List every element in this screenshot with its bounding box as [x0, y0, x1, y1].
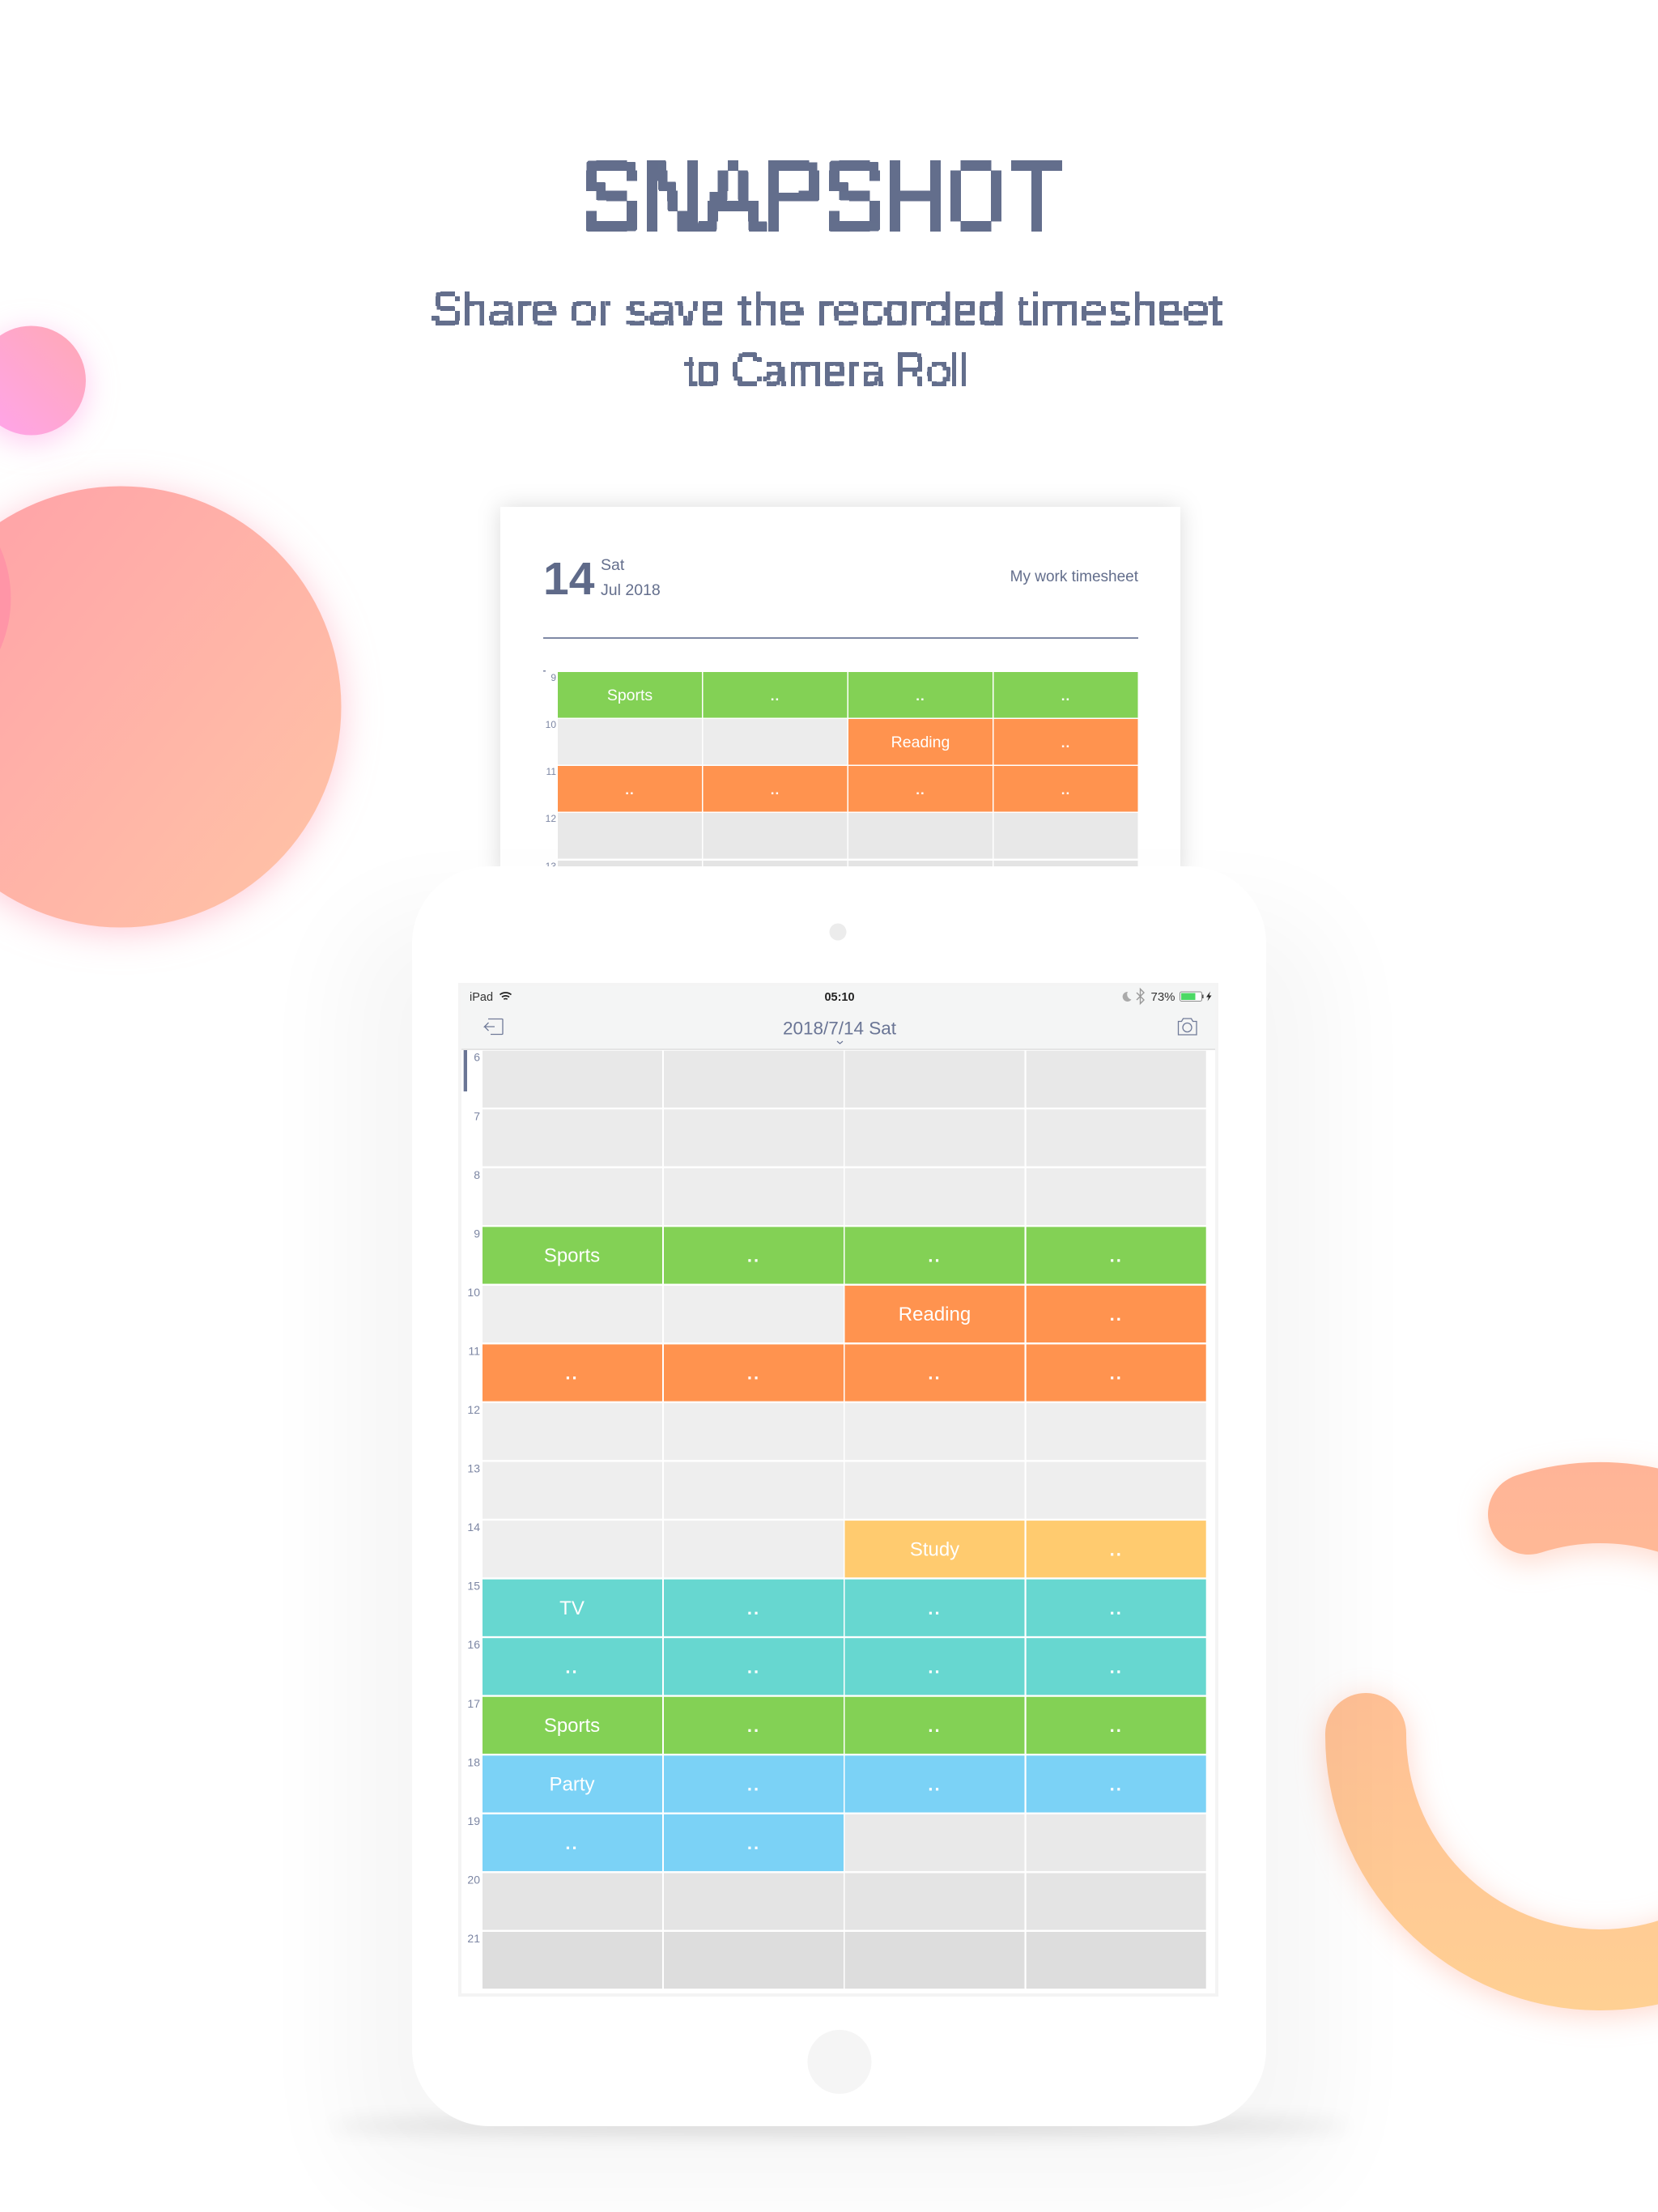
decorative arc: lower ring segment	[1366, 1733, 1658, 1970]
clock: 05:10	[824, 991, 855, 1004]
paper timesheet grid: ..	[916, 688, 925, 704]
icon: wifi	[500, 993, 512, 999]
paper timesheet grid: Sports	[607, 687, 653, 704]
shared timesheet paper	[500, 507, 1180, 907]
row 8	[474, 1168, 1206, 1225]
tablet soft shadow	[329, 907, 1350, 2194]
icon: camera	[1179, 1019, 1197, 1035]
row 17: sports: ..	[1110, 1716, 1123, 1736]
sheet name: My work timesheet	[1010, 568, 1139, 585]
row 9: sports: 9	[474, 1227, 480, 1240]
scroll indicator	[464, 1050, 467, 1091]
weekday and month	[601, 556, 661, 599]
row 14: study: Study	[910, 1538, 959, 1560]
decorative circle: small pink	[0, 325, 86, 436]
icon: back arrow	[484, 1019, 503, 1035]
row 11: reading continued: ..	[928, 1363, 942, 1384]
row 14: study	[467, 1521, 1206, 1577]
row 11: reading continued: ..	[1110, 1363, 1123, 1384]
paper timesheet grid	[543, 670, 1138, 907]
row 9: sports: ..	[1110, 1246, 1123, 1266]
row 16: tv continued: ..	[1110, 1657, 1123, 1677]
row 7: 7	[474, 1109, 480, 1122]
row 16: tv continued: 16	[467, 1638, 480, 1651]
date number: 14	[543, 553, 595, 605]
paper timesheet grid: 9	[551, 672, 556, 683]
row 15: tv: TV	[559, 1597, 585, 1619]
paper timesheet grid: 10	[546, 719, 556, 730]
icon: battery	[1180, 992, 1204, 1001]
row 19: party continued: ..	[565, 1833, 579, 1853]
row 20: 20	[467, 1873, 480, 1886]
paper timesheet grid: ..	[1061, 782, 1070, 798]
row 19: party continued: ..	[747, 1833, 760, 1853]
row 17: sports: ..	[747, 1716, 760, 1736]
tablet body	[412, 866, 1266, 2126]
paper timesheet grid: ..	[1061, 688, 1070, 704]
row 11: reading continued	[468, 1344, 1206, 1402]
battery percent: 73%	[1151, 990, 1175, 1004]
row 9: sports: ..	[747, 1246, 760, 1266]
row 18: party: ..	[1110, 1775, 1123, 1795]
paper timesheet grid: 11	[546, 766, 556, 777]
row 16: tv continued: ..	[565, 1657, 579, 1677]
row 14: study: 14	[467, 1521, 480, 1534]
row 11: reading continued: ..	[747, 1363, 760, 1384]
row 17: sports: ..	[928, 1716, 942, 1736]
row 16: tv continued: ..	[747, 1657, 760, 1677]
icon: charging bolt	[1206, 991, 1211, 1001]
icon: moon	[1123, 992, 1132, 1002]
row 20	[467, 1873, 1206, 1930]
paper timesheet grid: ..	[916, 782, 925, 798]
row 11: reading continued: ..	[565, 1363, 579, 1384]
row 11: reading continued: 11	[468, 1344, 480, 1357]
row 13: 13	[467, 1462, 480, 1475]
subtitle: Share or save the recorded timesheet	[431, 283, 1222, 336]
carrier label: iPad	[470, 991, 493, 1004]
status and navigation bar	[461, 986, 1215, 1050]
row 17: sports	[467, 1697, 1206, 1754]
title: SNAPSHOT	[579, 142, 1069, 264]
row 17: sports: 17	[467, 1697, 480, 1710]
row 15: tv: ..	[1110, 1598, 1123, 1619]
tablet camera	[829, 923, 847, 941]
weekday and month: Jul 2018	[601, 581, 661, 599]
row 10: reading	[467, 1286, 1206, 1342]
subtitle	[431, 283, 1222, 397]
row 16: tv continued: ..	[928, 1657, 942, 1677]
row 18: party: ..	[747, 1775, 760, 1795]
tablet home button	[808, 2030, 871, 2094]
row 15: tv	[467, 1580, 1206, 1636]
row 6	[474, 1051, 1206, 1108]
row 18: party: Party	[549, 1774, 595, 1796]
row 18: party: 18	[467, 1755, 480, 1768]
decorative circle: large salmon	[0, 473, 342, 928]
row 9: sports: Sports	[544, 1245, 600, 1267]
icon: bluetooth	[1137, 989, 1144, 1004]
tablet screen frame	[460, 985, 1217, 1995]
row 10: reading: Reading	[899, 1304, 971, 1325]
paper timesheet grid: ..	[771, 688, 780, 704]
row 10: reading: ..	[1110, 1304, 1123, 1325]
row 8: 8	[474, 1168, 480, 1181]
row 19: party continued	[467, 1814, 1206, 1871]
subtitle: to Camera Roll	[684, 344, 970, 397]
timesheet grid	[467, 1051, 1206, 1989]
row 12	[467, 1403, 1206, 1460]
row 15: tv: 15	[467, 1580, 480, 1593]
paper timesheet grid: ..	[771, 782, 780, 798]
row 15: tv: ..	[747, 1598, 760, 1619]
paper timesheet grid: Reading	[891, 734, 950, 751]
decorative arc: upper ring segment	[1528, 1503, 1658, 1737]
row 10: reading: 10	[467, 1286, 480, 1299]
paper timesheet grid: 13	[546, 861, 556, 872]
row 16: tv continued	[467, 1638, 1206, 1695]
date heading: 2018/7/14 Sat	[783, 1019, 897, 1038]
icon: date chevron	[837, 1041, 843, 1044]
row 12: 12	[467, 1403, 480, 1416]
row 9: sports: ..	[928, 1246, 942, 1266]
row 21	[467, 1932, 1206, 1989]
row 14: study: ..	[1110, 1539, 1123, 1559]
row 18: party	[467, 1755, 1206, 1812]
row 17: sports: Sports	[544, 1715, 600, 1737]
row 21: 21	[467, 1932, 480, 1945]
row 15: tv: ..	[928, 1598, 942, 1619]
row 18: party: ..	[928, 1775, 942, 1795]
weekday and month: Sat	[601, 556, 625, 574]
row 7	[474, 1109, 1206, 1166]
paper timesheet grid: ..	[625, 782, 635, 798]
paper timesheet grid: ..	[1061, 735, 1070, 751]
paper timesheet grid: 12	[546, 813, 556, 824]
row 6: 6	[474, 1051, 480, 1064]
row 19: party continued: 19	[467, 1814, 480, 1827]
row 9: sports	[474, 1227, 1206, 1284]
row 13	[467, 1462, 1206, 1519]
